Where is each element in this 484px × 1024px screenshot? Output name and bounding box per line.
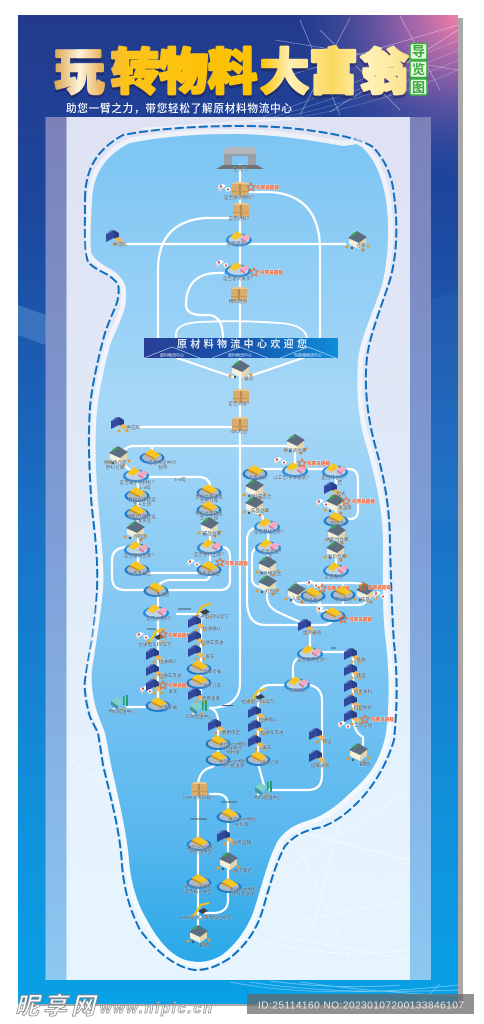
node: 拉式: 拉式	[336, 490, 346, 497]
title: 玩转物料大富翁: 大	[260, 36, 309, 107]
node: 预约单: 在线物流	[224, 745, 243, 752]
title: 玩转物料大富翁: 富	[309, 33, 358, 104]
node: 成品仓库	[198, 517, 222, 538]
node: 初步发料: 初步发料	[354, 688, 373, 695]
node: 是否进料: 是否进料？	[229, 215, 251, 222]
node: 是否验收	[229, 389, 251, 407]
title: 玩转物料大富翁: 玩	[55, 33, 104, 104]
watermark: 昵享网: www.nipic.cn	[100, 1001, 212, 1017]
node: 待检	[228, 360, 254, 382]
node: 大件物流区: 大件物流区	[259, 570, 282, 577]
node: 初步发料	[344, 680, 373, 696]
node: 转运区	[324, 512, 348, 527]
node: EMS拉通入库: EMS拉通入库及料位绑定	[180, 914, 232, 921]
node: 工艺模式: 何警员超级	[307, 460, 330, 467]
node: 成品仓库 右	[242, 496, 270, 516]
node: 待发货仓库 左: 原料仓库	[106, 464, 125, 471]
node: 发车 中: 发车	[205, 653, 215, 660]
banner: 原材料物流中心欢迎您: 原材料物流中心欢迎您	[177, 338, 307, 350]
node: 成品: 成品	[360, 596, 370, 603]
node: 转运区: 转运区	[330, 520, 344, 527]
node: 转运 右 1: 至物料库	[200, 497, 219, 504]
title: 玩转物料大富翁: 料	[208, 33, 257, 104]
node: 待发货仓库 左: 待发货仓库	[104, 459, 127, 466]
node: 产品集货: 产品集货	[304, 597, 323, 604]
node: 拉通车贯通 中: 拉通车贯通	[201, 639, 224, 646]
node: 拉通车贯通 左: 拉通车贯通	[159, 672, 182, 679]
node: 现货确认: 现货确认	[289, 687, 308, 694]
node: 拉通电子料 左: 何警员超级	[168, 632, 191, 639]
node: 补料单	[216, 808, 256, 828]
node: 是否整托出库 右	[194, 539, 226, 558]
node: 转运 右 1: 直接仓库转运	[195, 493, 223, 500]
watermark: id bar	[247, 994, 474, 1014]
node: 供应商 2: 供应商	[126, 424, 140, 431]
watermark: 昵享网: 昵享网	[15, 993, 98, 1020]
node: 是否转仓入: 否	[338, 480, 343, 486]
panel: map frame	[46, 117, 431, 980]
node: 预约单	[206, 735, 247, 756]
node: 打包区: 打包区	[265, 588, 279, 594]
node: 预约单: 预约单	[226, 749, 240, 756]
node: 分拣运输	[217, 830, 252, 846]
title: 玩转物料大富翁: 翁	[360, 33, 409, 104]
node: 工艺模式: 以工艺/字体模式？	[273, 474, 311, 481]
node: 出货通道	[298, 619, 322, 636]
node: 二次交接	[338, 710, 394, 729]
node: 运营确认报告: 运营确认报告	[184, 888, 212, 895]
title: 玩转物料大富翁	[55, 33, 409, 107]
icon: gate: 主大门	[233, 166, 247, 173]
node: 二次交接: 何警员超级	[371, 716, 394, 723]
title: 玩转物料大富翁: 转	[111, 33, 160, 104]
node: 发车 右: 发车	[262, 744, 272, 751]
node: 是否使用拉货	[297, 645, 329, 663]
node: 拉式	[324, 482, 346, 498]
node: 拉通车贯通 中	[188, 631, 224, 646]
node: 是否装配: 是否装配？	[261, 548, 283, 555]
node: EMS 下: EMS	[200, 943, 211, 949]
node: 发车 右	[248, 735, 272, 751]
node: 分拣区: 分拣装载区	[198, 570, 221, 577]
node: 是否转仓入: 是否转仓入？	[321, 474, 349, 481]
badge: 导览图: 图	[412, 80, 425, 95]
node: 是否整托出库 中: 是否整托出库？	[254, 528, 286, 535]
node: 转运 右 2: 物料仓库转运	[195, 510, 223, 517]
node: 是否接收物料: 何警员超级	[256, 184, 279, 191]
node: 线下集结	[216, 852, 253, 874]
node: 拉通电子料 中: 拉通电子料/读写	[195, 613, 229, 620]
node: 发货	[316, 606, 372, 623]
node: 转运	[344, 664, 366, 680]
node: 成品	[354, 582, 391, 604]
node: 是否整托出库 左: 是否整托出库？	[124, 552, 156, 559]
node: 接收: 接收	[356, 656, 366, 663]
node: 暂存: 是否传运中间	[148, 459, 176, 466]
node: 进行订单 中	[186, 674, 222, 689]
node: 仓库 左: 待检区	[133, 533, 147, 540]
route lines	[112, 165, 367, 927]
node: 物料成品仓	[242, 479, 272, 500]
node: 分拣区: 何警员超级	[225, 560, 248, 567]
node: 是否退货: 是否退货？	[227, 240, 249, 247]
node: 拉通电子料 右	[241, 688, 275, 705]
node: 拉通电子料 中	[192, 603, 229, 620]
icon: gate	[216, 147, 264, 173]
node: 物料集货: 物料集货	[334, 596, 353, 603]
node: 工艺模式	[273, 457, 330, 481]
banner: 原材料物流中心欢迎您: 原料物流中心	[228, 352, 252, 358]
node: 进行订单 右	[246, 751, 280, 766]
node: 物料配送中心 左	[108, 695, 136, 715]
node: 是否整托出库 右: 是否整托出库？	[194, 551, 226, 558]
bars	[147, 608, 336, 820]
node: 是否属于原材料: 是否属于原材料？	[120, 479, 156, 486]
banner: 原材料物流中心欢迎您: 废料物流中心	[160, 352, 184, 358]
node: 是否转仓入	[321, 463, 349, 486]
node: 分拣区	[187, 558, 248, 577]
node: 大件物流区	[256, 556, 282, 577]
node: 出库装载 中	[186, 660, 222, 675]
node: 发货单: 发货单	[338, 504, 352, 511]
node: 转运至工业园 1: 至工业园	[133, 500, 152, 507]
node: 待检出仓库: 待检出仓库	[326, 536, 349, 543]
node: 进行订单 中: 进行订单	[203, 682, 222, 689]
title: 玩转物料大富翁: 物	[159, 36, 208, 107]
watermark: id bar: ID:25114160 NO:20230107200133846107	[258, 1000, 464, 1012]
node: IQC检验: IQC检验	[230, 428, 248, 435]
node: 拉通确认 中	[188, 616, 222, 632]
node: 发车 左: 发车	[168, 688, 178, 695]
node: 货品调整区: 进行SOP物料	[187, 844, 215, 851]
node: 是否退货发货: 是否退货发货？	[223, 275, 255, 282]
node: 拉通确认 左: 拉通确认	[159, 658, 178, 665]
node: 补料单: 补料单	[235, 821, 249, 828]
node: 是否过物料	[143, 604, 174, 622]
node: 供应商: 供应商	[113, 241, 127, 248]
node: 是否装配	[255, 539, 283, 560]
node: 拉通电子料 右: 拉通电子料/读写	[241, 698, 275, 705]
watermark: 昵享网	[15, 993, 212, 1020]
node: 是否过物料: 是否过物料？	[146, 615, 174, 622]
node: 物料退货: 物料退货	[229, 298, 248, 305]
badge: 导览图: 导	[412, 44, 425, 59]
node: 出库装载 中: 出库装载	[203, 668, 222, 675]
node: 仓库 左	[124, 521, 148, 542]
node: 是否整托	[323, 562, 349, 580]
node: 发货单	[316, 494, 375, 514]
node: 产品集货	[300, 580, 350, 604]
node: 是否属于原材料	[120, 467, 186, 490]
node: 转运 中: 转运	[322, 738, 332, 745]
node: 费用审定	[208, 719, 241, 736]
node: 领料配送单	[216, 878, 257, 897]
node: 转运: 转运	[356, 672, 366, 679]
node: 暂存	[140, 449, 176, 471]
node: 费用查看: 费用查看	[202, 695, 221, 702]
node: 待检: 待验	[244, 375, 254, 382]
node: 转运至工业园 2: 至发货区	[133, 517, 152, 524]
node: 转运 右 2: 至工业园	[200, 514, 219, 521]
node: 拉通车贯通 右: 拉通车贯通	[261, 729, 284, 736]
title: 玩转物料大富翁: 大	[260, 33, 309, 104]
node: 预约配送单	[206, 751, 247, 769]
node: 是否装配: 是	[268, 554, 273, 560]
node: SOP分拣装载	[183, 782, 215, 801]
node: 出库装载 左: 出库装载	[159, 704, 178, 711]
node: 出库装载 左	[146, 697, 178, 712]
node: 拉通电子料 左	[136, 628, 191, 648]
node: 发车 左	[140, 679, 191, 695]
node: 发料仓库: 发料仓库	[328, 553, 347, 560]
node: 仓库发货: 仓库发货	[249, 474, 268, 481]
node: IQC检验	[230, 417, 248, 435]
map island	[91, 134, 389, 962]
node: 费用查看	[188, 688, 221, 704]
node: 运营确认报告: 进行SOP物料	[184, 883, 212, 890]
node: 拉通电子料 左: 拉通电子料/读写	[138, 641, 172, 648]
node: 分拣装载区: 分拣装载区	[129, 570, 152, 577]
node: 物料配送中心 右	[254, 781, 282, 801]
node: 拉通车贯通 左	[146, 664, 182, 680]
title: 玩转物料大富翁: 料	[208, 36, 257, 107]
node: 分拣装载区	[124, 561, 152, 577]
node: 是否退货发货	[216, 260, 283, 282]
node: 预约单: 进行SOP物料	[219, 741, 247, 748]
node: 成品仓库: 成品仓库	[203, 530, 222, 537]
node: 转运至工业园 1	[124, 487, 156, 507]
node: EMS拉通入库	[180, 902, 232, 921]
title: 玩转物料大富翁: 翁	[360, 36, 409, 107]
node: 是否整托出库 中	[254, 518, 286, 535]
node: SOP分拣装载: SOP分拣装载？	[183, 794, 215, 801]
node: 进行订单 右: 进行订单	[261, 759, 280, 766]
node: 供应商	[106, 230, 127, 248]
node: 仓库	[346, 231, 370, 252]
node: 华南配送中心	[185, 700, 213, 720]
node: 接收	[344, 648, 366, 664]
node: 入库	[284, 583, 308, 604]
banner: 原材料物流中心欢迎您	[144, 338, 338, 358]
subtitle: 助您一臂之力，带您轻松了解原材料物流中心	[66, 102, 292, 115]
node: 发货单: 何警员超级	[352, 498, 375, 505]
node: 拉通确认 中: 拉通确认	[203, 625, 222, 632]
node: 转运至工业园 2	[124, 505, 156, 524]
badge: 导览图: 览	[412, 62, 425, 77]
node: 补料单: 进行SOP物料	[228, 816, 256, 823]
node: 现货确认	[284, 676, 310, 694]
node: 供应商 2	[111, 417, 140, 432]
node: 货品调整区	[186, 836, 215, 855]
node: 是否使用拉货: 是否使用拉货？	[297, 656, 329, 663]
node: 成品: 何警员超级	[368, 584, 391, 591]
node: 领料配送单: 领料配送单	[232, 890, 255, 897]
node: 发料仓库	[324, 541, 348, 562]
node: 分拣运输: 分拣运输	[233, 839, 252, 846]
node: 领料配送单: 进行SOP物料	[229, 886, 257, 893]
title: 玩转物料大富翁: 物	[159, 33, 208, 104]
node: 货品调整区: 货品调整区	[190, 848, 213, 855]
node: 是否退货	[226, 231, 252, 247]
node: 拉通确认 右	[248, 706, 278, 723]
node: 待检出仓库	[324, 524, 349, 544]
node: 发车 中	[188, 645, 215, 660]
node: 是否接收物料: 是否接收物料？	[224, 194, 256, 201]
node: 集货区: 集货区	[156, 591, 170, 598]
badge: 导览图	[410, 44, 427, 95]
node: 运输通道: 运输通道	[311, 762, 330, 769]
node: 待发货仓库 左	[104, 446, 130, 471]
node: 物料集货	[330, 586, 356, 603]
node: 二次交接: 二次交接	[354, 722, 373, 729]
node: 发货: 何警员超级	[349, 616, 372, 623]
node: 运营确认报告	[184, 874, 212, 895]
title: 玩转物料大富翁: 玩	[55, 36, 104, 107]
node: 产品集货: 何警员超级	[327, 585, 350, 592]
node: 物料成品仓: 物料成品仓	[249, 493, 272, 500]
node: 入库: 入库	[291, 595, 301, 602]
node: 转运 右 2	[195, 501, 223, 521]
node: 打包防护	[344, 695, 373, 711]
node: 是否整托出库 左	[124, 541, 156, 559]
node: 是否接收物料	[218, 182, 279, 201]
node: 是否整托: 是否整托？	[325, 573, 347, 580]
node: 是否属于原材料: 5-8吨	[174, 476, 186, 482]
node: 仓库: 仓库	[356, 242, 366, 249]
node: 物料退货	[229, 287, 248, 305]
node: EMS 下	[186, 925, 211, 949]
node: 是否属于原材料: 1-8吨	[139, 484, 151, 490]
map island dashed border	[85, 126, 397, 970]
node: 运输通道	[309, 750, 330, 769]
node: 物料配送中心 右: 物料配送中心	[254, 794, 282, 801]
node: 仓库发货	[242, 465, 268, 481]
node: 预约配送单: 预约配送单	[222, 762, 245, 769]
node: 拉通确认 左	[146, 648, 178, 665]
node: 线下集结: 线下集结	[234, 867, 253, 874]
node: 拉通车贯通 右	[248, 720, 284, 736]
node: 出货通道: 出货通道	[303, 629, 322, 636]
node: 打包区	[256, 575, 280, 596]
title: 玩转物料大富翁: 富	[309, 36, 358, 107]
node: 是否验收: 是否验收？	[229, 400, 251, 407]
node: 发车 左: 何警员超级	[168, 682, 191, 689]
node: 转运 右 1	[195, 484, 223, 504]
node: 是否退货发货: 何警员超级	[260, 269, 283, 276]
title: 玩转物料大富翁: 转	[111, 36, 160, 107]
node: 费用审定: 费用审定	[222, 729, 241, 736]
node: 成品仓库 右: 成品仓库	[251, 507, 270, 514]
node: 暂存: 暂存	[158, 464, 168, 471]
node: 集货区	[144, 582, 170, 598]
node: 打包防护: 打包防护	[354, 704, 373, 711]
banner: 原材料物流中心欢迎您: 包装箱物流中心	[294, 352, 322, 358]
node: 物料配送中心 左: 物料配送中心	[108, 708, 136, 715]
node: 转运至工业园 1: 直接仓库转运	[128, 496, 156, 503]
node: 拉通确认 右: 拉通确认	[259, 716, 278, 723]
node: 待发货仓库 右	[284, 434, 308, 454]
node: 转运 中	[309, 728, 332, 745]
node: 是否进料	[229, 203, 251, 222]
node: 转运至工业园 2: 物料仓库转运	[128, 513, 156, 520]
node: 华南配送中心: 华南配送中心	[185, 713, 213, 720]
node: EMS 右	[346, 743, 371, 768]
node: EMS 右: EMS	[360, 762, 371, 768]
node: 预约配送单: 进行SOP物料	[219, 758, 247, 765]
node: 待发货仓库 右: 待发货仓库	[284, 447, 307, 454]
